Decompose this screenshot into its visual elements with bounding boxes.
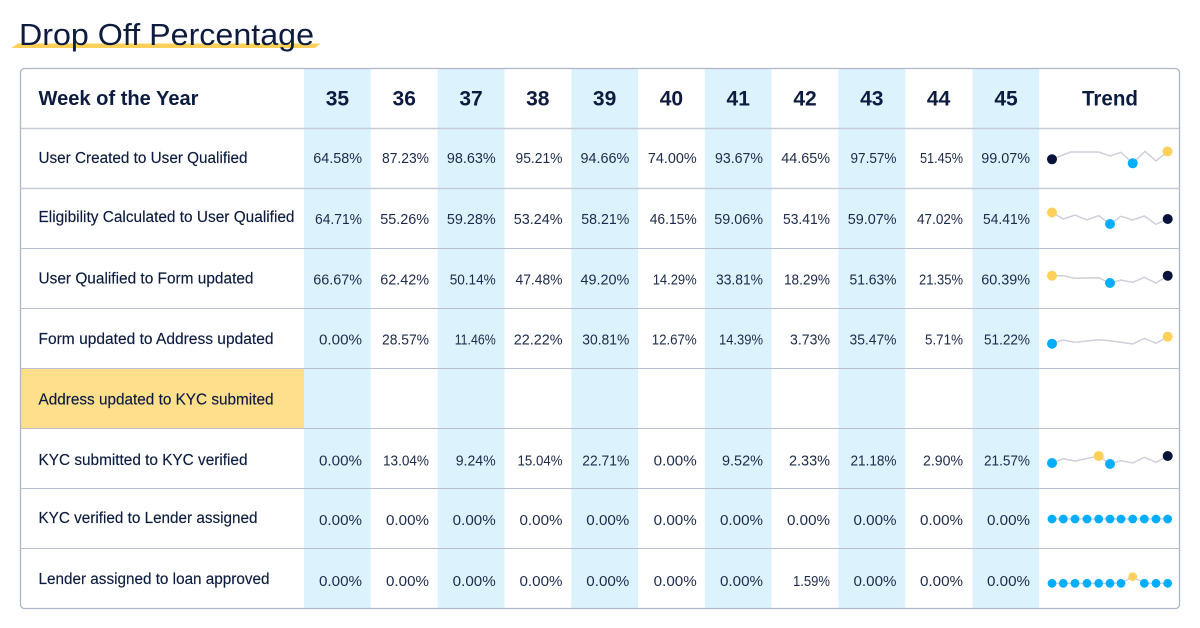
row: User Qualified to Form updated: 18.29%	[784, 272, 830, 288]
row: KYC verified to Lender assigned: 0.00%	[319, 513, 362, 529]
row: User Qualified to Form updated	[38, 270, 1173, 288]
row: User Created to User Qualified: 51.45%	[920, 151, 963, 167]
row: Eligibility Calculated to User Qualified: 58.21%	[581, 212, 629, 228]
row: User Created to User Qualified: 95.21%	[516, 151, 563, 167]
row: User Qualified to Form updated: 14.29%	[653, 272, 697, 288]
row: Lender assigned to loan approved: 0.00%	[586, 574, 630, 590]
row: Lender assigned to loan approved: 0.00%	[854, 574, 897, 590]
row: KYC verified to Lender assigned: 0.00%	[720, 513, 763, 529]
header row: 45	[994, 88, 1018, 110]
row: Eligibility Calculated to User Qualified: 59.07%	[848, 212, 897, 228]
row: User Qualified to Form updated: 62.42%	[380, 272, 429, 288]
row: Form updated to Address updated: 11.46%	[455, 332, 496, 348]
row: KYC verified to Lender assigned	[38, 510, 1172, 529]
row: Eligibility Calculated to User Qualified: 54.41%	[983, 212, 1030, 228]
row: User Created to User Qualified: User Created to User Qualified	[38, 150, 248, 167]
row: KYC submitted to KYC verified	[38, 451, 1173, 470]
row: Form updated to Address updated: 12.67%	[652, 332, 697, 348]
row: Form updated to Address updated: 28.57%	[382, 332, 429, 348]
header row: 35	[326, 88, 349, 110]
row: User Created to User Qualified	[38, 146, 1172, 168]
row: KYC submitted to KYC verified: 13.04%	[383, 454, 429, 470]
row: KYC submitted to KYC verified: 9.52%	[722, 454, 763, 470]
row: User Created to User Qualified: 99.07%	[981, 151, 1030, 167]
header row	[38, 88, 1138, 110]
row: Form updated to Address updated: 14.39%	[719, 332, 763, 348]
row: User Qualified to Form updated: 49.20%	[580, 272, 629, 288]
row: Form updated to Address updated: 5.71%	[925, 332, 963, 348]
row: Form updated to Address updated: 3.73%	[790, 332, 830, 348]
row: User Qualified to Form updated: User Qualified to Form updated	[38, 270, 254, 288]
header row: 38	[526, 88, 550, 110]
row: KYC submitted to KYC verified: KYC submitted to KYC verified	[38, 452, 248, 469]
row: Eligibility Calculated to User Qualified: 46.15%	[650, 212, 697, 228]
header row: 36	[393, 88, 416, 110]
row: KYC submitted to KYC verified: 22.71%	[582, 454, 629, 470]
row: KYC verified to Lender assigned: 0.00%	[987, 513, 1030, 529]
header row: 41	[727, 88, 750, 110]
row: Eligibility Calculated to User Qualified: 64.71%	[315, 212, 362, 228]
row: KYC verified to Lender assigned: 0.00%	[586, 513, 630, 529]
header row: 37	[459, 88, 483, 110]
row: KYC submitted to KYC verified: 21.57%	[984, 454, 1030, 470]
row: Lender assigned to loan approved: 0.00%	[920, 574, 963, 590]
row: Lender assigned to loan approved: 1.59%	[793, 574, 830, 590]
row: Form updated to Address updated: 30.81%	[582, 332, 629, 348]
row: Lender assigned to loan approved: 0.00%	[453, 574, 496, 590]
sparkline	[1047, 451, 1173, 469]
row: Lender assigned to loan approved: 0.00%	[720, 574, 763, 590]
row: User Created to User Qualified: 44.65%	[781, 151, 830, 167]
row: Lender assigned to loan approved: Lender assigned to loan approved	[38, 571, 270, 588]
row: Lender assigned to loan approved	[38, 571, 1172, 590]
row: KYC verified to Lender assigned: 0.00%	[920, 513, 963, 529]
row: KYC verified to Lender assigned: 0.00%	[453, 513, 496, 529]
row: Lender assigned to loan approved: 0.00%	[319, 574, 362, 590]
row: User Qualified to Form updated: 33.81%	[716, 272, 763, 288]
row: Form updated to Address updated: 22.22%	[514, 332, 563, 348]
row: KYC submitted to KYC verified: 0.00%	[319, 454, 362, 470]
row: User Qualified to Form updated: 66.67%	[313, 272, 362, 288]
row: User Qualified to Form updated: 47.48%	[516, 272, 563, 288]
row: Lender assigned to loan approved: 0.00%	[386, 574, 429, 590]
sparkline	[1047, 271, 1173, 288]
row: User Created to User Qualified: 97.57%	[850, 151, 897, 167]
row: Eligibility Calculated to User Qualified	[38, 208, 1173, 229]
row: Lender assigned to loan approved: 0.00%	[654, 574, 697, 590]
row: User Created to User Qualified: 74.00%	[648, 151, 697, 167]
row: Eligibility Calculated to User Qualified: 59.28%	[447, 212, 496, 228]
row: User Qualified to Form updated: 51.63%	[850, 272, 897, 288]
row: KYC verified to Lender assigned: 0.00%	[386, 513, 429, 529]
highlighted row background	[21, 369, 304, 428]
row: KYC submitted to KYC verified: 0.00%	[654, 454, 697, 470]
header row: 39	[593, 88, 616, 110]
row: Address updated to KYC submited: Address updated to KYC submited	[38, 392, 274, 408]
row: KYC submitted to KYC verified: 9.24%	[456, 454, 496, 470]
header row: 40	[660, 88, 683, 110]
row: KYC submitted to KYC verified: 2.90%	[923, 454, 963, 470]
alternating week column shading	[304, 69, 1039, 608]
row: KYC verified to Lender assigned: 0.00%	[520, 513, 563, 529]
row: Form updated to Address updated	[38, 331, 1173, 349]
row: Eligibility Calculated to User Qualified: 59.06%	[714, 212, 763, 228]
sparkline	[1048, 515, 1172, 523]
row: Eligibility Calculated to User Qualified: 53.24%	[514, 212, 563, 228]
row: Lender assigned to loan approved: 0.00%	[987, 574, 1030, 590]
title: Drop Off Percentage	[19, 17, 314, 52]
row: User Qualified to Form updated: 50.14%	[450, 272, 496, 288]
row: Lender assigned to loan approved: 0.00%	[520, 574, 563, 590]
row: User Created to User Qualified: 87.23%	[382, 151, 429, 167]
row: User Qualified to Form updated: 21.35%	[919, 272, 963, 288]
row: Eligibility Calculated to User Qualified: 47.02%	[917, 212, 963, 228]
header row: Week of the Year	[38, 88, 199, 110]
header row: 42	[793, 88, 817, 110]
row: Form updated to Address updated: Form updated to Address updated	[38, 331, 274, 348]
sparkline	[1047, 332, 1173, 349]
row: Form updated to Address updated: 51.22%	[984, 332, 1030, 348]
row: User Qualified to Form updated: 60.39%	[981, 272, 1030, 288]
sparkline	[1047, 146, 1172, 168]
sparkline	[1047, 208, 1173, 229]
row: KYC verified to Lender assigned: 0.00%	[854, 513, 897, 529]
row: KYC submitted to KYC verified: 2.33%	[789, 454, 830, 470]
row: KYC verified to Lender assigned: 0.00%	[654, 513, 697, 529]
row: Eligibility Calculated to User Qualified: 53.41%	[783, 212, 830, 228]
row: KYC submitted to KYC verified: 15.04%	[518, 454, 563, 470]
row: Form updated to Address updated: 35.47%	[850, 332, 897, 348]
row: KYC verified to Lender assigned: 0.00%	[787, 513, 830, 529]
row: Eligibility Calculated to User Qualified: 55.26%	[380, 212, 429, 228]
sparkline	[1048, 572, 1172, 588]
row: Eligibility Calculated to User Qualified: Eligibility Calculated to User Qualified	[38, 209, 294, 226]
row: KYC submitted to KYC verified: 21.18%	[850, 454, 897, 470]
header row: 44	[927, 88, 951, 110]
header row: Trend	[1082, 88, 1138, 110]
row: User Created to User Qualified: 64.58%	[313, 151, 362, 167]
row: User Created to User Qualified: 98.63%	[447, 151, 496, 167]
row: Form updated to Address updated: 0.00%	[319, 332, 362, 348]
row: KYC verified to Lender assigned: KYC verified to Lender assigned	[38, 510, 258, 527]
row: User Created to User Qualified: 93.67%	[715, 151, 763, 167]
header row: 43	[860, 88, 883, 110]
row: User Created to User Qualified: 94.66%	[580, 151, 629, 167]
